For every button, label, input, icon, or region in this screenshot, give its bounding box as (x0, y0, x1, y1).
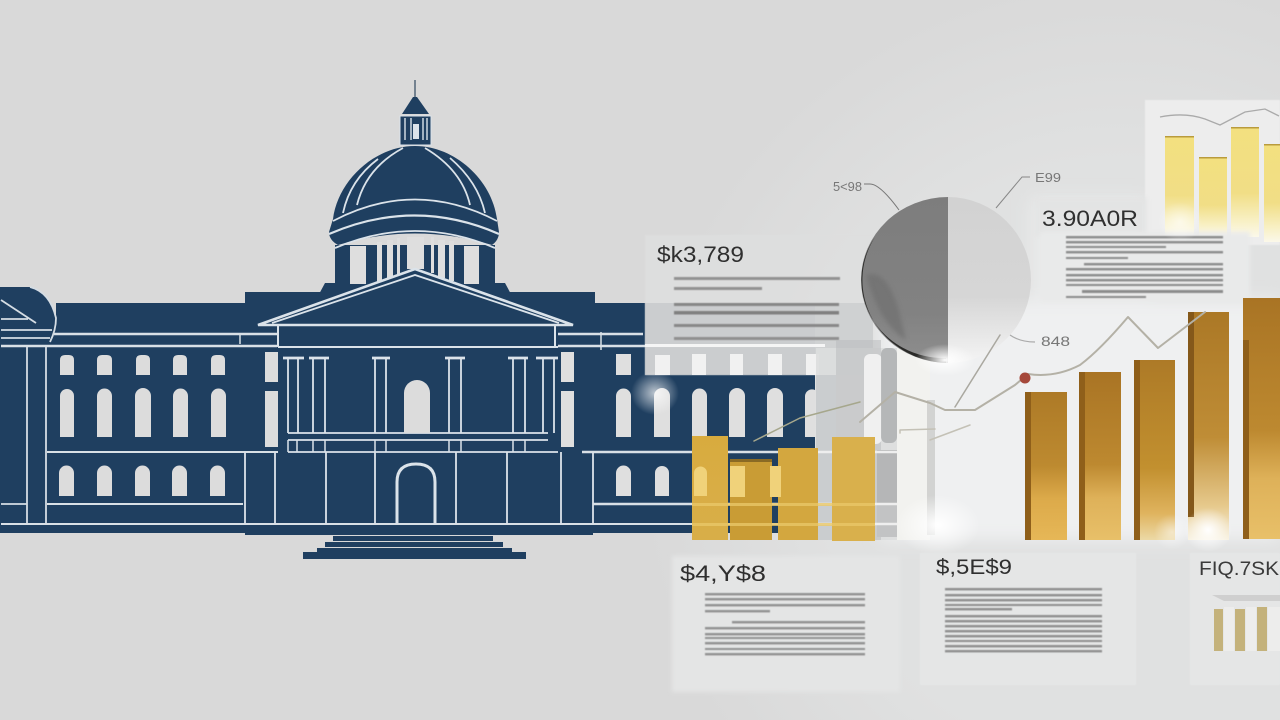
top right pale bar chart panel (1145, 100, 1280, 245)
gold bar 4 (832, 437, 875, 541)
pie leader and label lower right: 848 (1041, 333, 1070, 349)
pale gold bar 4 (1264, 144, 1280, 242)
value heading: FIQ.7SK (1199, 559, 1279, 580)
bar 4 (1188, 312, 1229, 540)
translucent column overlay behind gold bars (815, 340, 935, 540)
gold bar 1 (692, 436, 728, 540)
entrance steps (303, 536, 526, 559)
value heading: $4,Y$8 (680, 561, 766, 586)
gold bar 3 (778, 448, 818, 540)
light glows (631, 202, 1232, 555)
building body (0, 268, 815, 535)
wing horizontal lines (1, 332, 815, 524)
dome cupola (329, 146, 499, 245)
gold bar 2 (730, 459, 772, 540)
central arched window (404, 380, 430, 433)
pie leader and label top right: E99 (1035, 170, 1061, 185)
left wing windows (59, 352, 278, 496)
pie dark rim (861, 237, 946, 363)
panel heading value: $k3,789 (657, 242, 744, 267)
bar 5 (1243, 298, 1280, 539)
value heading: $,5E$9 (936, 556, 1012, 579)
text lines (945, 588, 1102, 652)
trend line chart (754, 312, 1205, 441)
soft light backdrop behind charts (640, 0, 1280, 720)
bar 1 (1025, 392, 1067, 540)
colonnade (318, 245, 512, 296)
upper text block (1035, 197, 1250, 302)
large gold bar chart (1025, 298, 1280, 540)
value heading: 3.90A0R (1042, 206, 1138, 231)
translucent data panel over wing (645, 235, 881, 375)
panel text lines (674, 277, 840, 340)
pale gold bar 3 (1231, 127, 1259, 237)
central portico (245, 269, 593, 524)
bar 2 (1079, 372, 1121, 540)
pie leader and label top left: 5<98 (833, 179, 862, 194)
dome (318, 80, 512, 296)
faded window row (655, 354, 881, 375)
mini bar chart (1212, 595, 1280, 651)
pie chart (833, 170, 1070, 363)
pie leader and label top left (833, 179, 899, 210)
bottom panel 2 (920, 553, 1136, 685)
pie leader and label top right (996, 170, 1061, 208)
bar 3 (1134, 360, 1175, 540)
pale gold bar 1 (1165, 136, 1194, 235)
left pavilion details (1, 287, 56, 524)
panel trend line (1160, 109, 1279, 125)
body text lines (1066, 236, 1223, 298)
text lines (705, 593, 865, 655)
right wing windows (561, 352, 815, 496)
lantern (400, 116, 431, 145)
pie dark half (861, 197, 948, 363)
pie leader and label lower right (1010, 333, 1070, 349)
capitol building illustration (0, 80, 815, 559)
gold bar chart, foreground (692, 436, 875, 541)
entrance door (397, 464, 435, 524)
trend start marker (1020, 372, 1030, 384)
bottom panel 3 (1190, 553, 1280, 685)
pale gold bar 2 (1199, 157, 1227, 237)
bottom panel 1 (672, 556, 900, 692)
pie light half (948, 197, 1031, 363)
